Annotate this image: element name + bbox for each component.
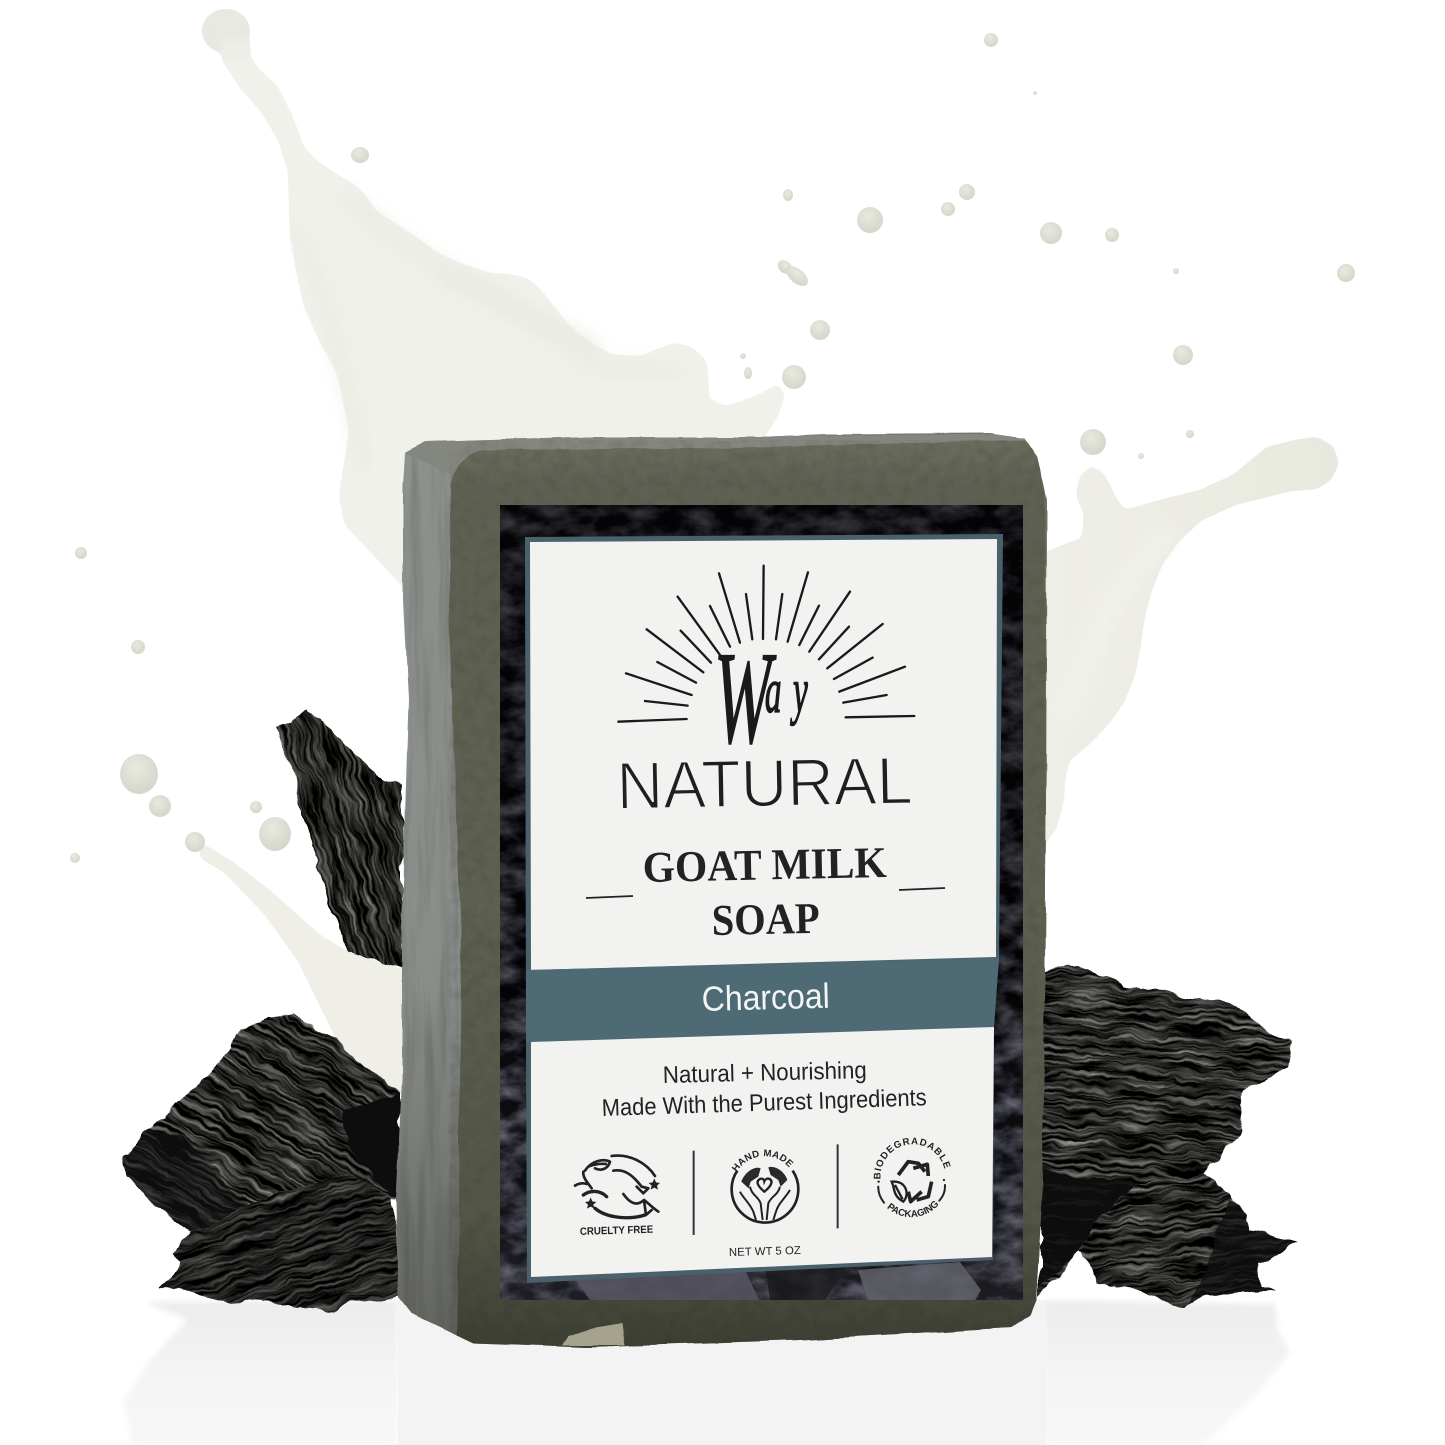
icon: biodegradable packaging: PACKAGING (887, 1201, 938, 1218)
milk splash: left tail (200, 842, 405, 1097)
label bottom panel (531, 1027, 994, 1277)
icon: biodegradable packaging (874, 1138, 951, 1218)
milk splash: right arm (1040, 437, 1339, 852)
charcoal: upper right chunk (1037, 964, 1292, 1297)
divider lines (694, 1144, 838, 1235)
icon: hand made (730, 1150, 800, 1224)
logo: Way script: W (714, 624, 771, 771)
charcoal: lower right chunk (1078, 1174, 1298, 1308)
surface reflection (124, 1300, 1290, 1445)
label top panel (530, 539, 997, 970)
heading: GOAT MILK SOAP: SOAP (711, 894, 820, 945)
logo: NATURAL: NATURAL (616, 743, 913, 824)
net weight: NET WT 5 OZ (729, 1245, 801, 1259)
charcoal: large left chunk (122, 1014, 401, 1232)
milk splash: main crown behind soap (202, 9, 800, 620)
logo: Way script: ay (765, 657, 819, 727)
tagline: Made With the Purest Ingredients (601, 1084, 927, 1122)
badges row (574, 1138, 951, 1259)
tagline (601, 1057, 927, 1122)
heading: GOAT MILK SOAP (586, 838, 945, 945)
charcoal: lower left chunk (158, 1174, 398, 1313)
icon: cruelty free rabbit (575, 1156, 660, 1218)
scent name: Charcoal (701, 977, 830, 1019)
icon: hand made: HAND MADE (732, 1150, 794, 1171)
label colour band (526, 958, 999, 1042)
soap body (390, 425, 1060, 1355)
printed charcoal panel (500, 505, 1023, 1300)
heading: GOAT MILK SOAP: GOAT MILK (642, 838, 887, 892)
soap bar (396, 432, 1048, 1348)
icon: biodegradable packaging: BIODEGRADABLE (874, 1138, 951, 1179)
logo: sun rays (618, 566, 914, 722)
label: cruelty free: CRUELTY FREE (580, 1224, 653, 1238)
label border (525, 534, 1003, 1283)
tagline: Natural + Nourishing (662, 1057, 867, 1089)
milk droplets (70, 33, 1355, 863)
charcoal: upper shard (276, 709, 404, 968)
